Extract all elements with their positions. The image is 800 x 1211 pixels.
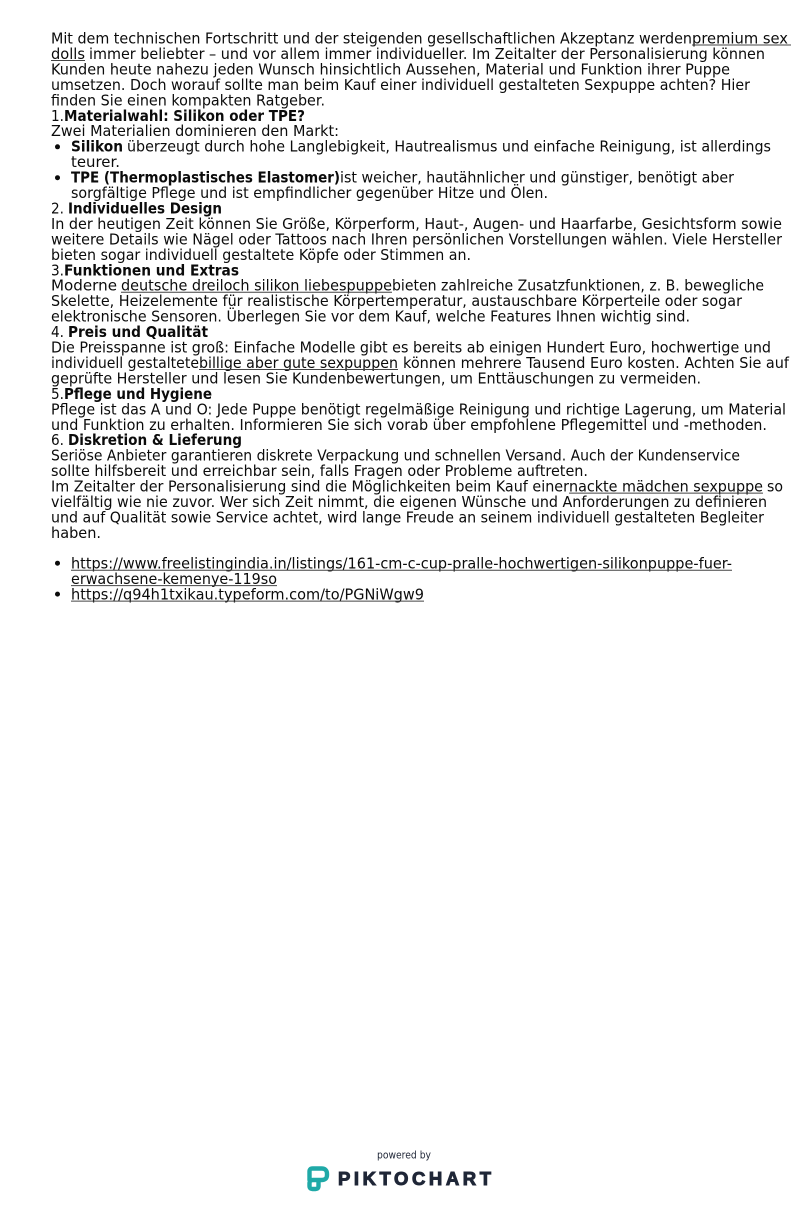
icon: Piktochart logo mark	[310, 1168, 327, 1189]
powered by label: powered by	[377, 1150, 431, 1162]
section 4: price and quality: Preis und Qualität	[68, 323, 208, 341]
section 3: functions and extras: Moderne	[51, 277, 117, 295]
section 6: discretion and delivery: 6.	[51, 431, 64, 449]
section 1: material choice	[51, 107, 771, 202]
section 2: individual design: 2.	[51, 200, 64, 218]
section 3: functions and extras: Skelette, Heizelemente für realistische Körpertemperatur, austauschbare Körperteile oder sogar	[51, 292, 743, 310]
section 2: individual design: weitere Details wie Nägel oder Tattoos nach Ihren persönlichen Vorstellungen wählen. Viele Hersteller	[51, 230, 783, 248]
link list: https://q94h1txikau.typeform.com/to/PGNiWgw9	[71, 586, 424, 604]
intro paragraph: Mit dem technischen Fortschritt und der steigenden gesellschaftlichen Akzeptanz werden	[51, 30, 692, 48]
section 4: price and quality: können mehrere Tausend Euro kosten. Achten Sie auf	[403, 354, 790, 372]
section 5: care and hygiene: Pflege ist das A und O: Jede Puppe benötigt regelmäßige Reinigung und richtige Lagerung, um Material	[51, 400, 786, 418]
section 3: functions and extras	[51, 261, 764, 326]
closing paragraph: nackte mädchen sexpuppe	[569, 478, 763, 496]
intro paragraph: immer beliebter – und vor allem immer individueller. Im Zeitalter der Personalisierung können	[89, 45, 765, 63]
section 6: discretion and delivery: sollte hilfsbereit und erreichbar sein, falls Fragen oder Probleme auftreten.	[51, 462, 588, 480]
section 5: care and hygiene: Pflege und Hygiene	[64, 385, 212, 403]
section 2: individual design: bieten sogar individuell gestaltete Köpfe oder Stimmen an.	[51, 246, 471, 264]
intro paragraph: umsetzen. Doch worauf sollte man beim Kauf einer individuell gestalteten Sexpuppe achten? Hier	[51, 76, 751, 94]
link list: erwachsene-kemenye-119so	[71, 570, 277, 588]
closing paragraph: haben.	[51, 524, 101, 542]
section 4: price and quality: individuell gestaltete	[51, 354, 199, 372]
section 1: material choice: teurer.	[71, 153, 120, 171]
footer: powered by Piktochart	[310, 1150, 492, 1189]
intro paragraph	[51, 30, 791, 109]
section 3: functions and extras: Funktionen und Extras	[64, 261, 239, 279]
section 1: material choice: 1.	[51, 107, 64, 125]
link list	[55, 555, 732, 604]
closing paragraph: vielfältig wie nie zuvor. Wer sich Zeit nimmt, die eigenen Wünsche und Anforderungen zu definieren	[51, 493, 767, 511]
section 1: material choice: Materialwahl: Silikon oder TPE?	[64, 107, 305, 125]
closing paragraph: so	[767, 478, 783, 496]
section 5: care and hygiene: und Funktion zu erhalten. Informieren Sie sich vorab über empfohlene Pflegemittel und -methoden.	[51, 416, 767, 434]
link list: https://www.freelistingindia.in/listings/161-cm-c-cup-pralle-hochwertigen-silikonpuppe-fuer-	[71, 555, 732, 573]
section 3: functions and extras: 3.	[51, 261, 64, 279]
section 4: price and quality: 4.	[51, 323, 64, 341]
section 1: material choice: Zwei Materialien dominieren den Markt:	[51, 122, 339, 140]
section 1: material choice: sorgfältige Pflege und ist empfindlicher gegenüber Hitze und Ölen.	[71, 184, 548, 202]
section 5: care and hygiene	[51, 385, 786, 434]
Piktochart wordmark: PIKTOCHART	[338, 1168, 492, 1189]
section 3: functions and extras: bieten zahlreiche Zusatzfunktionen, z. B. bewegliche	[392, 277, 764, 295]
closing paragraph: Im Zeitalter der Personalisierung sind die Möglichkeiten beim Kauf einer	[51, 478, 570, 496]
intro paragraph: premium sex	[692, 30, 788, 48]
intro paragraph: finden Sie einen kompakten Ratgeber.	[51, 91, 325, 109]
section 5: care and hygiene: 5.	[51, 385, 64, 403]
section 4: price and quality: geprüfte Hersteller und lesen Sie Kundenbewertungen, um Enttäuschungen zu vermeiden.	[51, 369, 701, 387]
closing paragraph: und auf Qualität sowie Service achtet, wird lange Freude an seinem individuell gestalteten Begleiter	[51, 508, 765, 526]
intro paragraph: Kunden heute nahezu jeden Wunsch hinsichtlich Aussehen, Material und Funktion ihrer Puppe	[51, 60, 730, 78]
section 2: individual design	[51, 200, 783, 264]
section 6: discretion and delivery: Seriöse Anbieter garantieren diskrete Verpackung und schnellen Versand. Auch der Kundenservice	[51, 447, 740, 465]
section 1: material choice: TPE (Thermoplastisches Elastomer)	[71, 169, 340, 187]
section 6: discretion and delivery: Diskretion & Lieferung	[68, 431, 242, 449]
section 1: material choice: Silikon	[71, 138, 123, 156]
section 3: functions and extras: elektronische Sensoren. Überlegen Sie vor dem Kauf, welche Features Ihnen wichtig sind.	[51, 308, 690, 326]
section 4: price and quality: Die Preisspanne ist groß: Einfache Modelle gibt es bereits ab einigen Hundert Euro, hochwertige und	[51, 338, 771, 356]
closing paragraph	[51, 478, 783, 542]
section 4: price and quality: billige aber gute sexpuppen	[199, 354, 398, 372]
section 2: individual design: Individuelles Design	[68, 200, 222, 218]
section 2: individual design: In der heutigen Zeit können Sie Größe, Körperform, Haut-, Augen- und Haarfarbe, Gesichtsform sowie	[51, 215, 782, 233]
section 6: discretion and delivery	[51, 431, 740, 480]
intro paragraph: dolls	[51, 45, 85, 63]
section 4: price and quality	[51, 323, 790, 387]
section 1: material choice: ist weicher, hautähnlicher und günstiger, benötigt aber	[340, 169, 735, 187]
section 1: material choice: überzeugt durch hohe Langlebigkeit, Hautrealismus und einfache Reinigung, ist allerdings	[127, 138, 771, 156]
section 3: functions and extras: deutsche dreiloch silikon liebespuppe	[121, 277, 392, 295]
